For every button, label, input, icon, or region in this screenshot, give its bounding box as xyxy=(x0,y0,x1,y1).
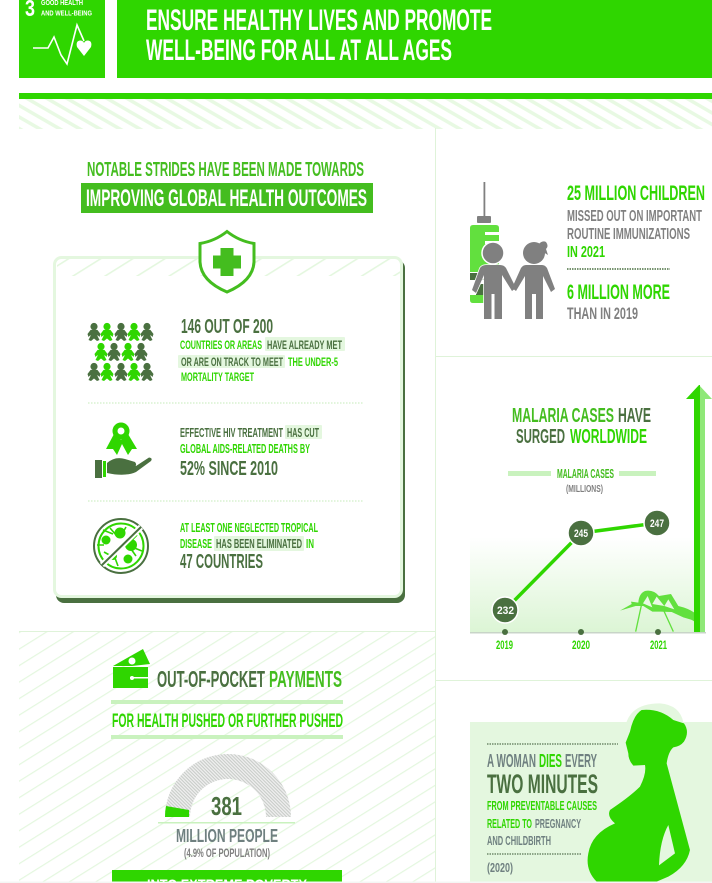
text: every two minutes: FROM PREVENTABLE CAUSES xyxy=(487,799,597,813)
stat: HIV treatment: EFFECTIVE HIV TREATMENT xyxy=(180,426,283,440)
text: every two minutes: PREGNANCY xyxy=(535,817,581,831)
heading: OUT-OF-POCKET xyxy=(157,666,265,692)
stat: missed immunizations: THAN IN 2019 xyxy=(567,305,638,323)
title banner xyxy=(117,0,712,78)
gauge sublabel: (4.9% OF POPULATION) xyxy=(184,846,270,860)
stat: missed immunizations: IN 2021 xyxy=(567,244,605,261)
heading: PAYMENTS xyxy=(269,666,342,692)
stat: HIV treatment: 52% SINCE 2010 xyxy=(180,458,278,480)
arrow: upward surge xyxy=(686,385,712,632)
legend: (MILLIONS) xyxy=(566,483,603,495)
legend: MALARIA CASES xyxy=(557,467,614,481)
stat: HIV treatment xyxy=(180,425,322,480)
heading: SURGED xyxy=(516,426,565,448)
panel: maternal mortality xyxy=(470,703,712,883)
gauge label: MILLION PEOPLE xyxy=(176,826,278,846)
line chart: 2020 xyxy=(572,640,590,652)
text: every two minutes xyxy=(487,751,598,875)
line chart xyxy=(470,510,706,652)
stat: missed immunizations xyxy=(567,182,705,323)
legend xyxy=(508,467,656,495)
text: every two minutes: TWO MINUTES xyxy=(487,769,598,799)
line chart: 245 xyxy=(574,528,588,540)
text: every two minutes: AND CHILDBIRTH xyxy=(487,834,551,848)
heading highlighted: IMPROVING GLOBAL HEALTH OUTCOMES xyxy=(86,185,367,212)
hatched band xyxy=(19,99,712,129)
icon: neglected disease crossed out xyxy=(94,519,148,573)
stat: under-5 mortality: OR ARE ON TRACK TO MEET xyxy=(181,355,283,369)
icon: syringe xyxy=(470,182,499,303)
stat: tropical disease: 47 COUNTRIES xyxy=(180,551,263,573)
panel: malaria xyxy=(470,385,712,652)
stat: tropical disease: IN xyxy=(306,537,314,551)
subheading: FOR HEALTH PUSHED OR FURTHER PUSHED xyxy=(112,711,343,732)
panel: health outcomes xyxy=(54,159,405,603)
goal badge xyxy=(19,0,105,78)
goal name line 2: AND WELL-BEING xyxy=(41,8,92,18)
heading: WORLDWIDE xyxy=(570,426,647,448)
heading line: NOTABLE STRIDES HAVE BEEN MADE TOWARDS xyxy=(87,159,364,181)
gauge chart: 381 xyxy=(211,791,242,821)
header rule xyxy=(19,93,712,99)
stat: HIV treatment: HAS CUT xyxy=(287,426,319,440)
icon: children xyxy=(472,241,555,319)
heading: MALARIA CASES xyxy=(512,405,614,427)
heading highlighted xyxy=(81,183,373,213)
line chart: 2021 xyxy=(650,640,667,652)
icon: ribbon and hand xyxy=(95,425,152,478)
text: every two minutes: EVERY xyxy=(565,751,597,771)
text: every two minutes: DIES xyxy=(539,751,562,771)
text: every two minutes: (2020) xyxy=(487,861,513,875)
icon: shield xyxy=(200,232,254,292)
band: into extreme poverty xyxy=(112,870,342,883)
stat: under-5 mortality: MORTALITY TARGET xyxy=(181,370,254,384)
title line 2: WELL-BEING FOR ALL AT ALL AGES xyxy=(146,34,452,67)
heading xyxy=(512,405,651,448)
line chart: 2019 xyxy=(496,640,513,652)
stat: under-5 mortality: 146 OUT OF 200 xyxy=(181,316,273,338)
heading: HAVE xyxy=(618,405,651,427)
stat: HIV treatment: GLOBAL AIDS-RELATED DEATHS BY xyxy=(180,442,310,456)
text: every two minutes: A WOMAN xyxy=(487,751,536,771)
panel: out-of-pocket payments xyxy=(19,631,435,883)
icon: children pictogram xyxy=(88,323,154,381)
stat: under-5 mortality xyxy=(178,316,345,384)
stat: tropical disease: AT LEAST ONE NEGLECTED TROPICAL xyxy=(180,521,318,535)
icon: pregnant woman xyxy=(583,703,707,883)
panel: immunization xyxy=(470,182,705,323)
stat: under-5 mortality: THE UNDER-5 xyxy=(288,355,338,369)
line chart: 232 xyxy=(497,605,514,617)
stat: tropical disease xyxy=(180,521,318,573)
stat: tropical disease: DISEASE xyxy=(180,537,212,551)
stat: under-5 mortality: HAVE ALREADY MET xyxy=(267,338,342,352)
icon: heartbeat xyxy=(33,25,91,64)
stat: under-5 mortality: COUNTRIES OR AREAS xyxy=(180,338,262,352)
card xyxy=(54,258,405,603)
gauge chart xyxy=(158,754,295,824)
text: every two minutes: RELATED TO xyxy=(487,817,532,831)
stat: tropical disease: HAS BEEN ELIMINATED xyxy=(216,537,302,551)
icon: wallet xyxy=(113,649,150,688)
icon: mosquito xyxy=(620,591,694,632)
line chart: 247 xyxy=(650,518,664,530)
